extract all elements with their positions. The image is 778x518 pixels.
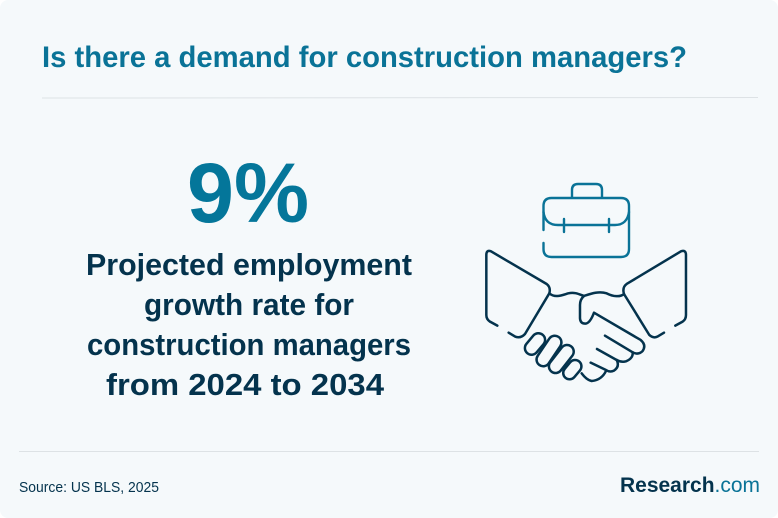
right cuff and arm	[623, 251, 686, 337]
top of the clasped hands	[549, 292, 624, 296]
big statistic: 9%: 9%	[187, 146, 309, 240]
thumb and palm of right hand	[580, 296, 644, 354]
right hand fingers	[597, 349, 633, 362]
logo: Research.com: Research.com	[620, 474, 760, 497]
statistic description	[86, 247, 412, 402]
source note: Source: US BLS, 2025	[19, 480, 159, 496]
icon: briefcase	[544, 184, 629, 257]
statistic description: construction managers	[87, 327, 411, 362]
icon: handshake	[486, 251, 686, 382]
statistic description: Projected employment	[86, 247, 412, 282]
statistic description: growth rate for	[144, 287, 354, 322]
statistic description: from 2024 to 2034	[106, 367, 385, 402]
left cuff and arm	[486, 251, 550, 337]
title: Is there a demand for construction managers?	[42, 41, 687, 74]
left hand fingers	[522, 331, 548, 357]
